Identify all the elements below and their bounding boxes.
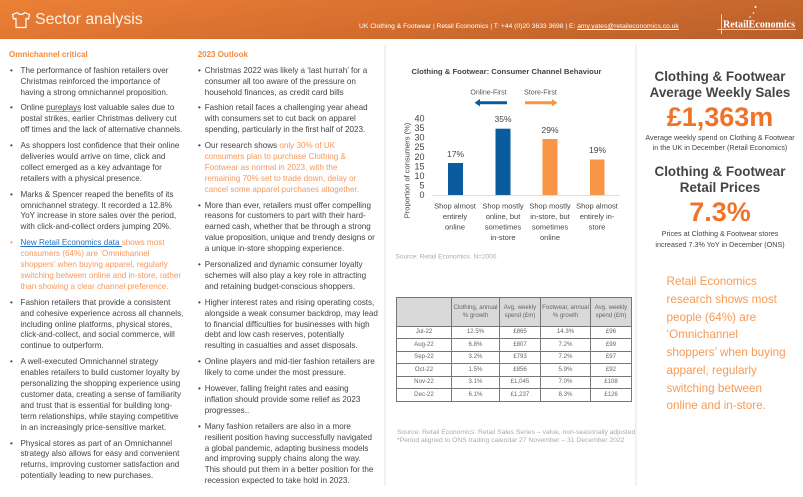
stat caption: Prices at Clothing & Footwear stores	[662, 229, 778, 238]
bar: shop almost entirely online: 17%	[447, 149, 464, 159]
y axis: 20	[414, 152, 424, 162]
data table: Jul-22	[416, 328, 432, 335]
data table: Dec-22	[414, 391, 434, 398]
data table: 14.3%	[557, 328, 574, 335]
bar: shop almost entirely in-store: 19%	[589, 145, 606, 155]
data table: 1.5%	[469, 366, 482, 373]
text column: outlook bullets: •	[198, 260, 201, 269]
stat caption	[655, 229, 785, 249]
y axis: 25	[414, 142, 424, 152]
text column: outlook bullets: Footwear as normal in 2023, with the	[205, 163, 337, 172]
text column: omnichannel bullets: •	[10, 103, 13, 112]
table source note: Source: Retail Economics: Retail Sales Series – value, non-seasonally adjusted	[397, 429, 635, 436]
text column: outlook bullets: •	[198, 298, 201, 307]
category labels: online	[445, 222, 465, 232]
arrow: online-first: Online-First	[470, 90, 507, 96]
text column: outlook bullets: Personalized and dynamic consumer loyalty	[205, 260, 363, 269]
text column: outlook bullets: •	[198, 66, 201, 75]
text column: outlook bullets: remaining 70% set to trade down, delay or	[205, 174, 356, 183]
text column: omnichannel bullets: strategy also allows for easy and convenient	[20, 449, 179, 458]
category labels: Shop almost	[434, 202, 477, 210]
stat heading	[655, 164, 786, 195]
y axis: 10	[414, 171, 424, 181]
stat heading: Average Weekly Sales	[650, 85, 790, 100]
category labels: in-store	[490, 233, 516, 242]
column divider right	[635, 45, 637, 486]
data table: 6.8%	[469, 341, 482, 348]
text column: omnichannel bullets: and cohesive experience across all channels,	[20, 309, 183, 318]
bar chart: consumer channel behaviour	[396, 67, 620, 260]
text column: outlook bullets: progresses..	[205, 406, 249, 415]
page title: Sector analysis	[35, 11, 143, 28]
text column: omnichannel bullets: personalizing the shopping experience using	[20, 379, 180, 388]
text column: outlook bullets: alongside a weak consumer backdrop, may lead	[205, 309, 378, 318]
stat heading: Clothing & Footwear	[655, 68, 785, 84]
text column: omnichannel bullets: Online pureplays lost valuable sales due to	[20, 103, 174, 112]
data table: £96	[606, 328, 616, 335]
data table: spend (£m)	[505, 312, 535, 318]
heading: omnichannel critical: Omnichannel critical	[9, 50, 88, 58]
data table: spend (£m)	[596, 312, 626, 318]
text column: outlook bullets: schemes will also play a key role in attracting	[205, 271, 366, 280]
text column: omnichannel bullets: including online platforms, physical stores,	[20, 320, 172, 329]
logo	[717, 6, 796, 34]
text column: omnichannel bullets: Physical stores as part of an Omnichannel	[20, 439, 172, 448]
data table: 12.5%	[467, 328, 484, 335]
text column: outlook bullets: likely to come under the most pressure.	[205, 368, 346, 377]
category labels: sometimes	[485, 222, 521, 232]
text column: outlook bullets: Fashion retail faces a challenging year ahead	[205, 103, 368, 112]
callout: switching between	[666, 382, 762, 395]
bar: shop mostly in-store	[541, 125, 559, 195]
text column: outlook bullets: spending, particularly in the first half of 2023.	[205, 125, 365, 134]
data table: £108	[604, 378, 618, 385]
data table: £97	[606, 353, 616, 360]
text column: outlook bullets: reasons for customers to part with their hard-	[205, 211, 366, 220]
stat heading	[650, 68, 790, 100]
y axis: 5	[419, 180, 424, 190]
text column: omnichannel bullets: continue to outperform.	[20, 341, 104, 350]
data table: £1,237	[511, 391, 529, 398]
data table: Aug-22	[414, 341, 434, 348]
data table: 7.0%	[559, 378, 572, 385]
text column: outlook bullets: household finances, as credit card bills	[205, 88, 344, 96]
text column: omnichannel bullets: •	[10, 66, 13, 75]
arrow: store-first: Store-First	[524, 90, 557, 96]
bar: shop mostly online: 35%	[494, 114, 512, 124]
text column: omnichannel bullets: and trust that is essential for building long-	[20, 401, 172, 410]
text column: omnichannel bullets: consumers (64%) are ‘Omnichannel	[20, 249, 150, 258]
text column: omnichannel bullets: in an increasingly price-sensitive market.	[20, 423, 166, 432]
text column: omnichannel bullets: having a strong omnichannel proposition.	[20, 88, 168, 96]
data table: Nov-22	[414, 378, 434, 385]
text column: omnichannel bullets: potentially leading to new purchases.	[20, 471, 153, 480]
stat heading: Retail Prices	[680, 180, 760, 195]
text column: omnichannel bullets: term relationships, while staying competitive	[20, 412, 178, 421]
text column: outlook bullets	[198, 66, 378, 485]
text column: omnichannel bullets: •	[10, 190, 13, 199]
stat caption: Average weekly spend on Clothing & Footwear	[645, 133, 795, 142]
data table: 6.1%	[469, 391, 482, 398]
text column: omnichannel bullets: YoY increase in store sales over the period,	[20, 211, 176, 220]
y axis: 0	[419, 190, 424, 200]
category labels: Shop almost	[576, 202, 619, 210]
text column: outlook bullets: •	[198, 384, 201, 393]
stat caption: increased 7.3% YoY in December (ONS)	[655, 240, 785, 249]
data table: 8.3%	[559, 391, 572, 398]
text column: outlook bullets: recession expected to take hold in 2023.	[205, 476, 350, 485]
y axis: 40	[414, 114, 424, 124]
text column: outlook bullets: inflation should provide some relief as 2023	[205, 395, 360, 404]
callout: ‘Omnichannel	[666, 328, 738, 341]
bar: shop almost entirely online	[447, 149, 464, 195]
heading: 2023 outlook: 2023 Outlook	[198, 50, 248, 58]
data table: Avg. weekly	[595, 304, 627, 310]
category labels: online, but	[486, 212, 521, 221]
data table: Footwear, annual	[542, 304, 589, 310]
data table: £865	[513, 328, 527, 335]
chart title: Clothing & Footwear: Consumer Channel Behaviour	[411, 67, 602, 76]
data table: Oct-22	[415, 366, 433, 373]
text column: omnichannel bullets: click-and-collect, and social commerce, will	[20, 330, 175, 339]
category labels	[434, 202, 619, 242]
text column: omnichannel bullets: The performance of fashion retailers over	[20, 66, 169, 75]
data table: £856	[513, 366, 527, 373]
text column: outlook bullets: •	[198, 201, 201, 210]
text column: omnichannel bullets: •	[10, 141, 13, 150]
text column: omnichannel bullets: •	[10, 439, 13, 448]
data table: % growth	[463, 312, 488, 318]
category labels: entirely	[443, 212, 467, 221]
text column: omnichannel bullets: A well-executed Omnichannel strategy	[20, 357, 158, 366]
text column: outlook bullets: earned cash, whether that be through a strong	[205, 222, 371, 231]
stat: retail prices	[655, 164, 786, 249]
data table: £92	[606, 366, 616, 373]
bar: shop mostly in-store: 29%	[541, 125, 559, 135]
data table: 3.1%	[469, 378, 482, 385]
text column: omnichannel bullets: with click-and-collect orders jumping 20%.	[20, 222, 171, 231]
text column: outlook bullets: resulting in casualties and asset disposals.	[205, 341, 358, 350]
category labels: store	[589, 222, 605, 232]
text column: omnichannel bullets: returns, improving customer satisfaction and	[20, 460, 179, 469]
arrow: store-first	[524, 90, 558, 106]
data table: £126	[604, 391, 618, 398]
data table: £793	[513, 353, 527, 360]
text column: omnichannel bullets: shoppers’ when buying apparel, regularly	[20, 260, 168, 269]
arrow: online-first	[470, 90, 507, 106]
callout: research shows most	[666, 293, 777, 306]
text column: omnichannel bullets: than showing a clear channel preference.	[20, 282, 169, 291]
data table: £99	[606, 341, 616, 348]
icon: t-shirt	[12, 12, 30, 28]
text column: outlook bullets: This should put them in a better position for the	[205, 465, 373, 474]
column divider left	[384, 45, 386, 486]
text column: outlook bullets: However, falling freight rates and easing	[205, 384, 349, 393]
category labels: Shop mostly	[529, 202, 571, 210]
text column: outlook bullets: to financial difficulties for businesses with high	[205, 320, 370, 329]
text column: omnichannel bullets: postal strikes, earlier Christmas delivery cut	[20, 114, 177, 123]
text column: omnichannel bullets: deliveries would arrive on time, click and	[20, 152, 165, 161]
data table: 3.2%	[469, 353, 482, 360]
category labels: entirely in-	[580, 212, 615, 221]
category labels: Shop mostly	[482, 202, 524, 210]
logo: RetailEconomics	[723, 20, 795, 30]
callout: Retail Economics	[666, 275, 757, 288]
text column: omnichannel bullets: enables retailers to build customer loyalty by	[20, 368, 180, 377]
callout: people (64%) are	[666, 311, 756, 324]
stat caption: in the UK in December (Retail Economics)	[653, 143, 787, 152]
data table: Sep-22	[414, 353, 434, 360]
text column: outlook bullets: •	[198, 357, 201, 366]
data table	[396, 297, 632, 402]
stat caption	[645, 133, 795, 152]
text column: outlook bullets: a unique in-store shopping experience.	[205, 244, 344, 253]
text column: omnichannel bullets: •	[10, 238, 13, 247]
text column: omnichannel bullets: Fashion retailers that provide a consistent	[20, 298, 170, 307]
text column: outlook bullets: cancel some apparel purchases altogether.	[205, 185, 359, 194]
text column: outlook bullets: value proposition, unique and trendy designs or	[205, 233, 375, 242]
text column: outlook bullets: Online players and mid-tier fashion retailers are	[205, 357, 375, 366]
text column: omnichannel bullets: Christmas reinforced the importance of	[20, 77, 160, 86]
callout: shoppers’ when buying	[666, 346, 786, 359]
text column: outlook bullets: and improving supply chains along the way.	[205, 454, 361, 463]
bar: shop almost entirely in-store	[589, 145, 606, 195]
table source note: *Period aligned to ONS trading calendar 27 November – 31 December 2022	[397, 437, 624, 444]
text column: outlook bullets: Many fashion retailers are also in a more	[205, 422, 351, 431]
category labels: online	[540, 233, 560, 242]
text column: omnichannel bullets: •	[10, 298, 13, 307]
text column: outlook bullets: More than ever, retailers must offer compelling	[205, 201, 371, 210]
text column: omnichannel bullets	[10, 66, 183, 480]
text column: omnichannel bullets: omnichannel strategy. It recorded a 12.8%	[20, 201, 172, 210]
data table: 7.2%	[559, 353, 572, 360]
text column: outlook bullets: and retaining budget-conscious shoppers.	[205, 282, 355, 291]
data table: 7.2%	[559, 341, 572, 348]
text column: omnichannel bullets: •	[10, 357, 13, 366]
text column: outlook bullets: a global pandemic, adapting business models	[205, 444, 368, 453]
text column: omnichannel bullets: New Retail Economics data shows most	[20, 238, 164, 247]
text column: outlook bullets: consumers plan to purchase Clothing &	[205, 152, 346, 161]
data table: Clothing, annual	[453, 304, 498, 310]
chart source: Source: Retail Economics. N=2000	[396, 254, 497, 260]
stat value: 7.3%	[689, 197, 751, 227]
data table: £807	[513, 341, 527, 348]
text column: outlook bullets: debt and low cash reserves, potentially	[205, 330, 344, 339]
bar: shop mostly online	[494, 114, 512, 195]
data table: Avg. weekly	[504, 304, 536, 310]
data table: £1,045	[511, 378, 529, 385]
text column: omnichannel bullets: collect emerged as a key advantage for	[20, 163, 162, 172]
text column: omnichannel bullets: As shoppers lost confidence that their online	[20, 141, 179, 150]
table source note	[397, 429, 635, 444]
text column: outlook bullets: Higher interest rates and rising operating costs,	[205, 298, 374, 307]
category labels: sometimes	[532, 222, 568, 232]
data table: 5.9%	[559, 366, 572, 373]
category labels: in-store, but	[530, 212, 571, 221]
text column: outlook bullets: Christmas 2022 was likely a ‘last hurrah’ for a	[205, 66, 367, 75]
text column: omnichannel bullets: customer data, creating a sense of familiarity	[20, 390, 181, 399]
text column: omnichannel bullets: off times and the lack of alternative channels.	[20, 125, 182, 134]
stat: average weekly sales	[645, 68, 795, 152]
text column: outlook bullets: Our research shows only 30% of UK	[205, 141, 335, 150]
y axis title: Proportion of consumers (%)	[402, 122, 412, 218]
text column: outlook bullets: resilient position having successfully navigated	[205, 433, 372, 442]
header banner	[0, 0, 803, 39]
stat heading: Clothing & Footwear	[655, 164, 785, 179]
callout: online and in-store.	[666, 399, 766, 412]
stat value: £1,363m	[667, 102, 773, 132]
text column: omnichannel bullets: switching between online and in-store, rather	[20, 271, 181, 280]
text column: outlook bullets: with consumers set to cut back on apparel	[205, 114, 356, 123]
text column: outlook bullets: •	[198, 103, 201, 112]
text column: outlook bullets: •	[198, 141, 201, 150]
text column: outlook bullets: consumer all too aware of the pressure on	[205, 77, 356, 86]
contact line: UK Clothing & Footwear | Retail Economics | T: +44 (0)20 3633 3698 | E: amy.yates@retaileconomics.co.uk	[359, 23, 679, 30]
text column: omnichannel bullets: retailers with a physical presence.	[20, 174, 142, 183]
text column: outlook bullets: •	[198, 422, 201, 431]
callout: apparel, regularly	[666, 364, 757, 377]
callout	[666, 275, 786, 412]
data table: % growth	[553, 312, 578, 318]
y axis: 15	[414, 162, 424, 172]
y axis: 30	[414, 132, 424, 142]
y axis: 35	[414, 123, 424, 133]
text column: omnichannel bullets: Marks & Spencer reaped the benefits of its	[20, 190, 173, 199]
y axis	[414, 114, 424, 200]
